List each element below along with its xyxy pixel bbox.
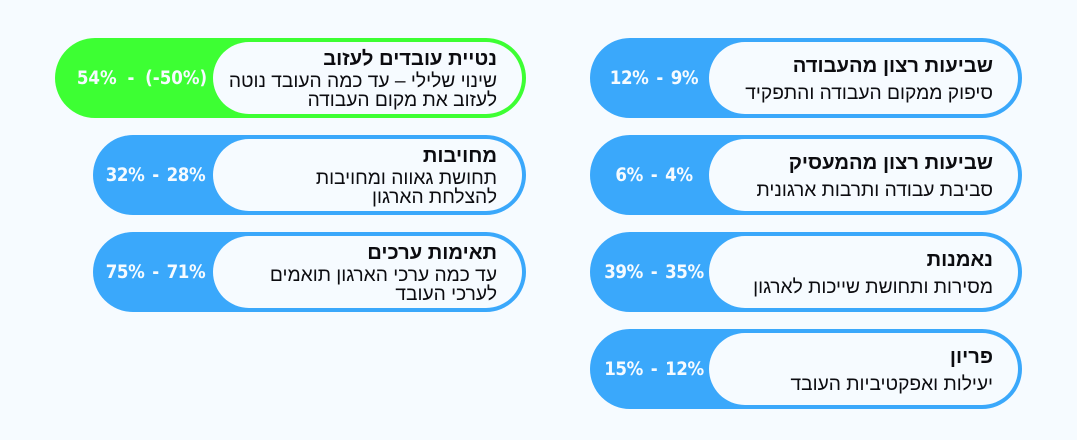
text block: turnover: נטיית עובדים לעזוב — [323, 48, 497, 70]
text block: turnover — [213, 42, 522, 114]
text block: commitment: מחויבות — [423, 145, 497, 167]
panel: commitment — [93, 135, 526, 215]
value: employer satisfaction range: 6% - 4% — [615, 165, 693, 186]
panel: employer satisfaction — [590, 135, 1022, 215]
panel: loyalty — [590, 232, 1022, 312]
panel: productivity — [590, 329, 1022, 409]
text block: job satisfaction: שביעות רצון מהעבודה — [793, 55, 993, 77]
panel: employee turnover — [55, 38, 526, 118]
text block: job satisfaction — [709, 42, 1018, 114]
text block: commitment: להצלחת הארגון — [372, 187, 497, 208]
text block: employer satisfaction — [709, 139, 1018, 211]
panel: value fit — [93, 232, 526, 312]
text block: loyalty: מסירות ותחושת שייכות לארגון — [753, 277, 993, 298]
panel: job satisfaction — [590, 38, 1022, 118]
text block: value fit: תאימות ערכים — [367, 242, 497, 264]
value: turnover range: 54% - (-50%) — [77, 68, 207, 89]
text block: productivity: פריון — [950, 346, 993, 368]
text block: productivity — [709, 333, 1018, 405]
value: loyalty range: 39% - 35% — [604, 262, 704, 283]
value: value fit range: 75% - 71% — [106, 262, 205, 283]
text block: job satisfaction: סיפוק ממקום העבודה והתפקיד — [745, 83, 993, 104]
text block: loyalty — [709, 236, 1018, 308]
text block: employer satisfaction: שביעות רצון מהמעסיק — [789, 152, 993, 174]
value: commitment range: 32% - 28% — [106, 165, 205, 186]
text block: loyalty: נאמנות — [927, 249, 993, 271]
text block: commitment — [213, 139, 522, 211]
text block: value fit: עד כמה ערכי הארגון תואמים — [270, 265, 497, 286]
text block: turnover: לעזוב את מקום העבודה — [308, 90, 497, 111]
value: productivity range: 15% - 12% — [604, 359, 704, 380]
text block: turnover: שינוי שלילי – עד כמה העובד נוטה — [229, 71, 497, 92]
text block: productivity: יעילות ואפקטיביות העובד — [790, 374, 993, 395]
text block: commitment: תחושת גאווה ומחויבות — [316, 168, 497, 189]
text block: value fit: לערכי העובד — [395, 284, 497, 305]
text block: employer satisfaction: סביבת עבודה ותרבות ארגונית — [757, 180, 993, 201]
value: job satisfaction range: 12% - 9% — [610, 68, 698, 89]
text block: value fit — [213, 236, 522, 308]
